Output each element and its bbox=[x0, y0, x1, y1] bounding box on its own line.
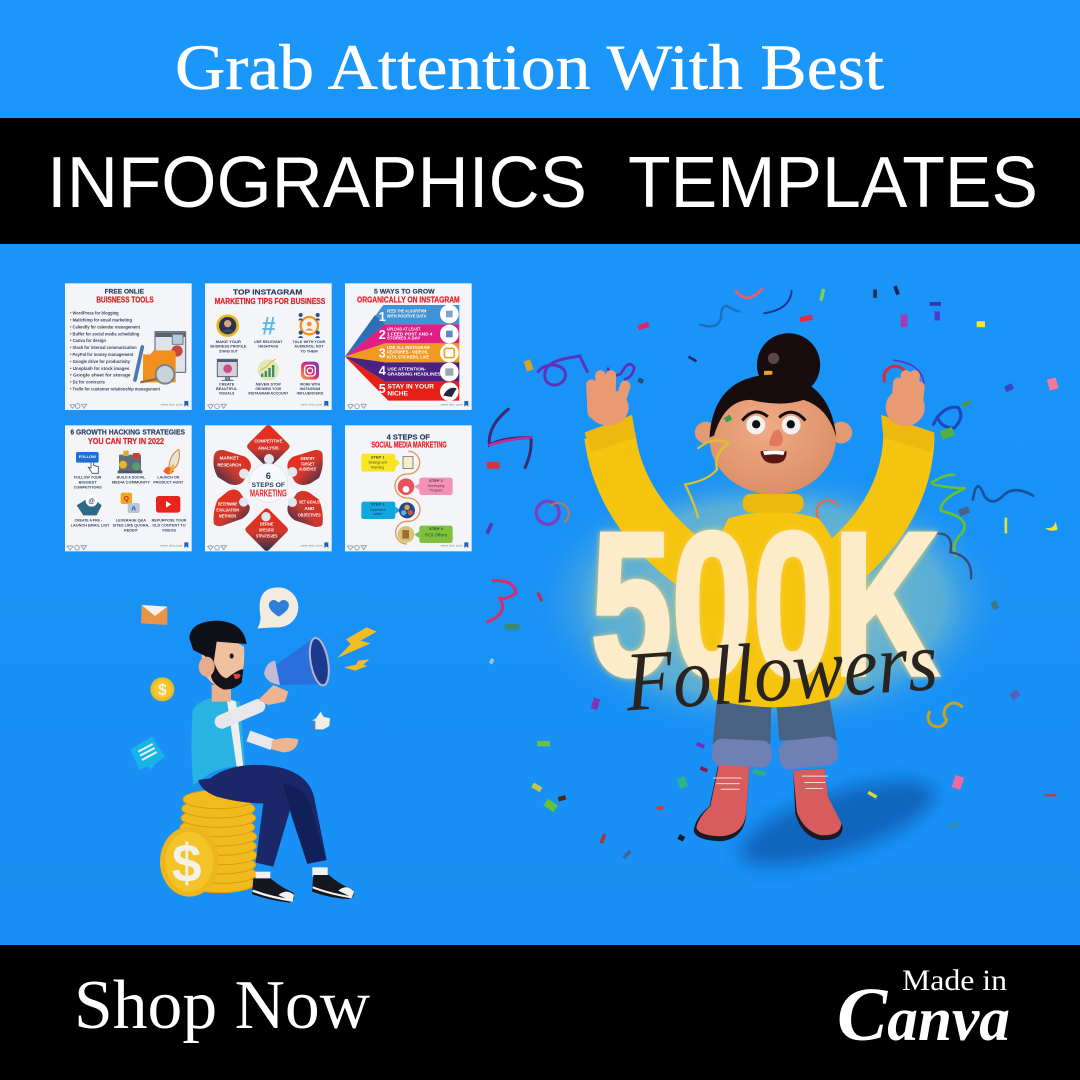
thumbnail: 6 steps of marketing: DETERMINE bbox=[218, 501, 238, 507]
thumbnail: 6 steps of marketing: TARGET bbox=[301, 461, 314, 467]
thumbnail: 4 steps of social media marketing: STEP 3 bbox=[371, 502, 385, 507]
thumbnail: 6 growth hacking strategies: REDDIT bbox=[124, 528, 139, 533]
thumbnail: 6 growth hacking strategies: VIDEOS bbox=[162, 528, 176, 533]
thumbnail: 6 growth hacking strategies: CREATE A PRE - bbox=[75, 518, 103, 523]
thumbnail: top Instagram marketing tips: TO THEM bbox=[300, 348, 318, 353]
thumbnail: top Instagram marketing tips: NEVER STOP bbox=[256, 381, 281, 386]
thumbnail: 5 ways to grow on Instagram: ORGANICALLY ON INSTAGRAM bbox=[357, 294, 460, 304]
thumbnail: top Instagram marketing tips: MAKE YOUR bbox=[216, 339, 241, 344]
thumbnail: 6 growth hacking strategies: MEDIA COMMUNITY bbox=[112, 480, 150, 485]
thumbnail: 4 steps of social media marketing: Implement bbox=[370, 508, 386, 512]
coin stack: $ bbox=[172, 835, 202, 894]
thumbnail: top Instagram marketing tips: HASHTAGS bbox=[258, 344, 279, 349]
thumbnail: 5 ways to grow on Instagram: STAY IN YOUR bbox=[387, 384, 434, 391]
thumbnail: top Instagram marketing tips: TOP INSTAGRAM bbox=[233, 287, 302, 296]
icon: lightning bolts bbox=[337, 627, 377, 671]
thumbnail: 5 ways to grow on Instagram: USE ATTENTION- bbox=[387, 366, 426, 371]
thumbnail: free online business tools: • Buffer for social media scheduling bbox=[70, 331, 140, 336]
thumbnail: 5 ways to grow on Instagram: STORIES A DAY bbox=[387, 336, 420, 341]
thumbnail: top Instagram marketing tips: AUDIENCE, NOT bbox=[294, 344, 324, 349]
thumbnail: 5 ways to grow on Instagram: 1 bbox=[379, 310, 386, 324]
thumbnail: 6 steps of marketing: save this post bbox=[301, 544, 323, 548]
thumbnail: free online business tools: • Trello for customer relationship management bbox=[70, 387, 161, 392]
thumbnail: top Instagram marketing tips: CREATE bbox=[219, 381, 235, 386]
top black banner: TEMPLATES bbox=[628, 143, 1038, 223]
thumbnail: 4 steps of social media marketing: 4 STEPS OF bbox=[387, 434, 431, 441]
thumbnail: 6 growth hacking strategies: SITES LIKE QUORA, bbox=[113, 523, 149, 528]
thumbnail: free online business tools: • Canva for design bbox=[70, 338, 106, 343]
thumbnail: 5 ways to grow on Instagram: 1 FEED POST AND 4 bbox=[387, 331, 433, 336]
thumbnail: 6 growth hacking strategies: @ bbox=[88, 498, 95, 505]
thumbnail: 5 ways to grow on Instagram: 3 bbox=[379, 346, 386, 360]
thumbnail: top Instagram marketing tips: WORK WITH bbox=[300, 381, 320, 386]
thumbnail: 6 growth hacking strategies: OLD CONTENT TO bbox=[152, 523, 186, 528]
thumbnail: top Instagram marketing tips: INSTAGRAM ACCOUNT bbox=[248, 391, 289, 396]
thumbnail: 4 steps of social media marketing: action bbox=[373, 512, 382, 516]
thumbnail: free online business tools: • Unsplash for stock images bbox=[70, 366, 130, 371]
thumbnail: 6 steps of marketing: COMPETITIVE bbox=[254, 439, 283, 445]
thumbnail: 4 steps of social media marketing: save this post bbox=[441, 544, 463, 548]
illustration: man with megaphone on coins bbox=[131, 587, 377, 903]
thumbnail: 6 growth hacking strategies: FOLLOW bbox=[79, 454, 96, 459]
thumbnail: 4 steps of social media marketing bbox=[345, 425, 472, 551]
thumbnail: 5 ways to grow on Instagram: NICHE bbox=[387, 390, 408, 397]
500K: 500K bbox=[591, 491, 938, 718]
thumbnail: 6 growth hacking strategies: BIGGEST bbox=[79, 480, 97, 485]
character body bbox=[585, 333, 935, 841]
thumbnail: 5 ways to grow on Instagram: GRABBING HEADLINES bbox=[387, 371, 441, 376]
thumbnail: 6 growth hacking strategies: LAUNCH ON bbox=[157, 475, 179, 480]
thumbnail: 4 steps of social media marketing: Strategy and bbox=[368, 461, 387, 465]
thumbnail: 5 ways to grow on Instagram: UPLOAD AT LEAST bbox=[387, 327, 421, 332]
thumbnail: top Instagram marketing tips: GROWING YOUR bbox=[255, 386, 281, 391]
panel: thumbnails row 2 bbox=[65, 424, 472, 552]
thumbnail: top Instagram marketing tips: VISUALS bbox=[219, 391, 235, 396]
thumbnail: 6 steps of marketing: 6 bbox=[266, 471, 271, 481]
thumbnail: 4 steps of social media marketing: Planning bbox=[371, 465, 384, 469]
thumbnail: 6 steps of marketing: AUDIENCE bbox=[299, 467, 317, 473]
thumbnail: 5 ways to grow on Instagram bbox=[345, 283, 472, 410]
icon: dollar coin: $ bbox=[158, 682, 167, 699]
thumbnail: top Instagram marketing tips: BEAUTIFUL bbox=[216, 386, 238, 391]
thumbnail: 6 steps of marketing: STEPS OF bbox=[252, 482, 285, 489]
top black banner: INFOGRAPHICS bbox=[47, 143, 587, 223]
thumbnail: free online business tools: • Google sheet for storage bbox=[70, 373, 131, 378]
thumbnail: 6 steps of marketing: RESEARCH bbox=[217, 463, 242, 469]
thumbnail: 6 steps of marketing: DEFINE bbox=[260, 521, 274, 527]
thumbnail: 6 steps of marketing: MARKET bbox=[220, 455, 239, 461]
glow behind 500K bbox=[529, 466, 1011, 737]
thumbnail: 6 steps of marketing: SPECIFIC bbox=[259, 527, 275, 533]
thumbnail: 6 growth hacking strategies: REPURPOSE YOUR bbox=[152, 518, 186, 523]
thumbnail: 6 steps of marketing: SET GOALS bbox=[299, 499, 320, 505]
thumbnail: 6 growth hacking strategies: PRODUCT HUNT bbox=[153, 480, 184, 485]
thumbnail: top Instagram marketing tips: INSTAGRAM bbox=[300, 386, 321, 391]
thumbnail: 6 steps of marketing: MARKETING bbox=[250, 488, 287, 499]
thumbnail: top Instagram marketing tips: save this post bbox=[301, 402, 322, 406]
thumbnail: 6 growth hacking strategies bbox=[65, 425, 192, 551]
Made in Canva: Canva bbox=[837, 973, 1010, 1057]
thumbnail: 4 steps of social media marketing: STEP 4 bbox=[429, 526, 444, 531]
thumbnail: top Instagram marketing tips: USE RELEVANT bbox=[254, 339, 283, 344]
icon: chat bubble bbox=[131, 737, 165, 770]
thumbnail: 6 steps of marketing: METHODS bbox=[219, 513, 237, 519]
thumbnail: free online business tools: • Mailchimp for email marketing bbox=[70, 317, 132, 322]
thumbnail: top Instagram marketing tips: TALK WITH YOUR bbox=[293, 339, 325, 344]
thumbnail: free online business tools: • WordPress for blogging bbox=[70, 310, 119, 315]
thumbnail: 6 growth hacking strategies: YOU CAN TRY IN 2022 bbox=[88, 436, 164, 446]
thumbnail: 5 ways to grow on Instagram: 5 WAYS TO GROW bbox=[374, 288, 435, 295]
thumbnail: 5 ways to grow on Instagram: 5 bbox=[379, 382, 386, 396]
thumbnail: free online business tools: • Dz for contracts bbox=[70, 380, 106, 385]
thumbnail: 4 steps of social media marketing: SOCIAL MEDIA MARKETING bbox=[371, 440, 447, 450]
thumbnail: 4 steps of social media marketing: STEP 1 bbox=[371, 454, 385, 459]
thumbnail: 6 growth hacking strategies: 6 GROWTH HACKING STRATEGIES bbox=[70, 430, 185, 437]
confetti ribbons bbox=[488, 289, 1033, 727]
icon: heart speech bubble bbox=[257, 587, 298, 629]
thumbnail: 6 growth hacking strategies: LAUNCH EMAIL LIST bbox=[71, 523, 110, 528]
thumbnail: 6 steps of marketing: IDENTIFY bbox=[301, 456, 315, 462]
thumbnail: free online business tools: FREE ONLIE bbox=[105, 289, 144, 296]
thumbnail: free online business tools: BUISNESS TOOLS bbox=[96, 294, 154, 304]
thumbnail: 5 ways to grow on Instagram: FEED THE ALGORITHM bbox=[387, 308, 427, 313]
title: Grab Attention With Best: Grab Attention With Best bbox=[175, 32, 884, 104]
panel: thumbnails row 1 bbox=[65, 283, 472, 410]
thumbnail: 6 steps of marketing: OBJECTIVES bbox=[298, 513, 321, 519]
thumbnail: 4 steps of social media marketing: ROI Offers bbox=[425, 533, 448, 538]
thumbnail: free online business tools: • Calendly for calendar management bbox=[70, 324, 141, 329]
thumbnail: 6 growth hacking strategies: COMPETITORS bbox=[74, 485, 102, 490]
thumbnail: 6 growth hacking strategies: FOLLOW YOUR bbox=[74, 475, 101, 480]
thumbnail: 6 steps of marketing bbox=[205, 424, 332, 552]
thumbnail: 6 steps of marketing: ANALYSIS bbox=[258, 445, 279, 451]
Made in Canva: Made in bbox=[902, 964, 1007, 997]
icon: envelope bbox=[141, 605, 167, 625]
thumbnail: 5 ways to grow on Instagram: IGTV, STICKERS, LIVE bbox=[387, 354, 429, 359]
top black banner bbox=[0, 118, 1080, 244]
bottom black banner bbox=[0, 945, 1080, 1080]
thumbnail: 6 growth hacking strategies: Q bbox=[124, 496, 129, 503]
thumbnail: free online business tools: • Slack for internal communication bbox=[70, 345, 137, 350]
thumbnail: 5 ways to grow on Instagram: 4 bbox=[379, 364, 386, 378]
thumbnail: 5 ways to grow on Instagram: WITH POSITIVE DATA bbox=[387, 314, 427, 319]
thumbnail: 4 steps of social media marketing: Program bbox=[430, 488, 443, 492]
thumbnail: 6 steps of marketing: AND bbox=[304, 506, 315, 512]
thumbnail: 4 steps of social media marketing: Developing bbox=[428, 484, 444, 488]
thumbnail: top Instagram marketing tips: BUSINESS PROFILE bbox=[210, 344, 247, 349]
Followers script: Followers bbox=[622, 615, 941, 730]
thumbnail: 5 ways to grow on Instagram: USE ALL INSTAGRAM bbox=[387, 345, 430, 350]
ground shadow bbox=[732, 763, 943, 883]
thumbnail: top Instagram marketing tips: INFLUENCERS bbox=[297, 391, 324, 396]
coin stack bbox=[160, 790, 257, 897]
icon: dollar coin bbox=[150, 677, 174, 701]
thumbnail: 6 steps of marketing: STRATEGIES bbox=[256, 533, 278, 539]
thumbnail: 4 steps of social media marketing: STEP 2 bbox=[429, 478, 444, 483]
thumbnail: top Instagram marketing tips: # bbox=[261, 313, 275, 340]
thumbnail: top Instagram marketing tips: MARKETING TIPS FOR BUSINESS bbox=[215, 296, 325, 306]
thumbnail: free online business tools: save this post bbox=[161, 402, 183, 406]
thumbnail: top Instagram marketing tips: STAND OUT bbox=[219, 348, 238, 353]
thumbnail: free online business tools: • Google drive for productivity bbox=[70, 359, 131, 364]
thumbnail: 5 ways to grow on Instagram: 2 bbox=[379, 328, 386, 342]
thumbnail: 6 growth hacking strategies: LEVERAGE Q&A bbox=[116, 518, 146, 523]
thumbnail: free online business tools: • PayPal for money management bbox=[70, 352, 134, 357]
thumbnail: 5 ways to grow on Instagram: FEATURES - VIDEOS, bbox=[387, 350, 428, 355]
Shop Now: Shop Now bbox=[74, 967, 370, 1044]
thumbnail: 6 growth hacking strategies: BUILD A SOCIAL bbox=[117, 475, 146, 480]
thumbnail: top Instagram marketing tips bbox=[205, 283, 332, 410]
thumbnail: 6 growth hacking strategies: save this post bbox=[160, 544, 183, 548]
man figure bbox=[189, 621, 354, 903]
thumbnail: 6 growth hacking strategies: A bbox=[131, 506, 136, 513]
thumbnail: free online business tools bbox=[65, 283, 192, 410]
thumbnail: 6 steps of marketing: EVALUATION bbox=[216, 507, 239, 513]
illustration: hero character with confetti and 500K followers bbox=[485, 285, 1059, 883]
thumbnail: 5 ways to grow on Instagram: save this post bbox=[441, 402, 463, 406]
confetti pieces bbox=[485, 285, 1059, 859]
icon: thumbs up bbox=[310, 712, 330, 730]
